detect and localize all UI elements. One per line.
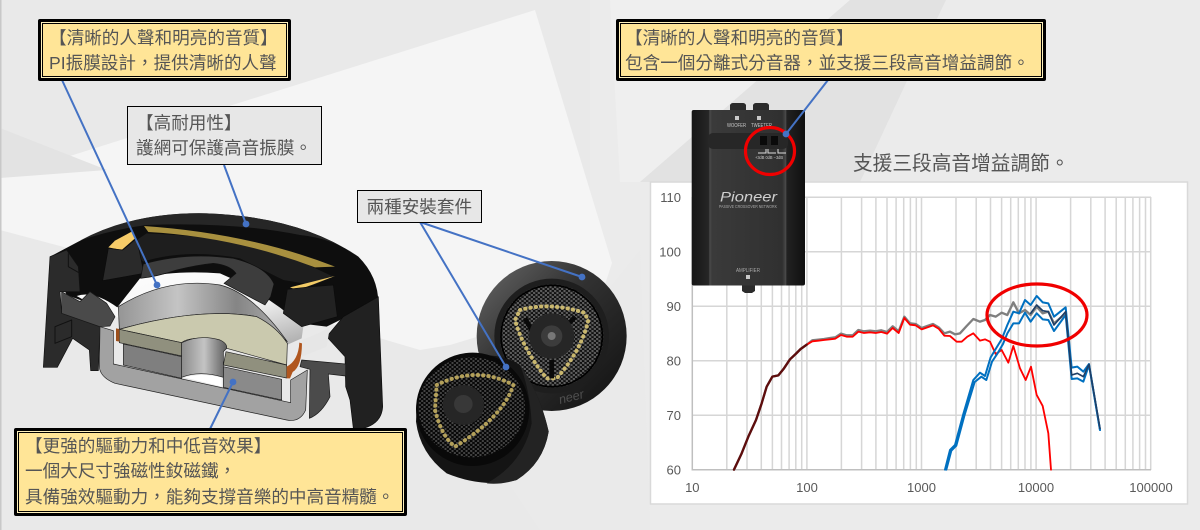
- device labels: Pioneer: [720, 188, 779, 204]
- callout: mounting kits: 兩種安裝套件: [366, 196, 472, 216]
- x axis labels: 100: [796, 480, 818, 495]
- left pillar: [103, 238, 144, 281]
- callout: stronger drive: [14, 428, 407, 516]
- inner back panel: [127, 233, 333, 285]
- flush mount tweeter: [477, 261, 627, 411]
- red highlight: gain switch: [746, 128, 794, 174]
- x axis labels: 10: [685, 480, 700, 495]
- left wall slats: [55, 253, 80, 343]
- callout: stronger drive: 具備強效驅動力，能夠支撐音樂的中高音精髓。: [25, 486, 394, 506]
- illustration: crossover network: [692, 103, 805, 293]
- device labels: TWEETER: [751, 123, 772, 129]
- y axis labels: 110: [660, 190, 681, 205]
- axes: [692, 197, 1151, 470]
- left wall: [43, 250, 100, 371]
- device labels: [719, 123, 783, 274]
- callout: mounting kits: [357, 190, 482, 223]
- y axis labels: [659, 190, 681, 478]
- angled mount tweeter: [403, 340, 549, 484]
- coil left: [116, 328, 119, 342]
- centre bore: [182, 338, 227, 377]
- gold tab right: [290, 276, 335, 290]
- housing back wall: [50, 213, 378, 327]
- white surround: [77, 272, 303, 345]
- right cone detail: [302, 327, 330, 357]
- switch ticks: [758, 149, 786, 153]
- device labels: PASSIVE CROSSOVER NETWORK: [719, 204, 777, 209]
- frequency response curves: [734, 296, 1100, 470]
- plate front right: [223, 352, 287, 378]
- gold strip: [144, 226, 335, 267]
- left flange: [62, 292, 115, 327]
- device labels: WOOFER: [727, 123, 746, 129]
- red highlight: treble gain range: [987, 284, 1087, 346]
- phase plug arch: [141, 256, 274, 305]
- leader: diaphragm: [62, 80, 160, 288]
- crossover body: [692, 110, 805, 286]
- grey full range curve: [734, 302, 1066, 470]
- callout: durability: [127, 106, 322, 165]
- leader: magnet: [210, 379, 236, 429]
- illustration: tweeter pair: [403, 261, 627, 484]
- bore opening: [184, 375, 222, 387]
- callout: durability: 護網可保護高音振膜。: [136, 138, 312, 158]
- leader: flush mount kit: [420, 222, 585, 280]
- chart title: 支援三段高音增益調節。: [853, 153, 1070, 175]
- leader: grille: [224, 165, 249, 227]
- dark red low-frequency curve: [734, 345, 807, 470]
- right wall: [327, 297, 383, 428]
- device labels: +3dB 0dB −3dB: [755, 155, 783, 161]
- y axis labels: 60: [667, 462, 681, 478]
- switch band: [708, 133, 788, 149]
- coil right: [287, 343, 302, 378]
- callout: crossover: 【清晰的人聲和明亮的音質】: [625, 28, 854, 48]
- grille band: [80, 213, 358, 257]
- red woofer curve: [807, 318, 1051, 470]
- right suspension: [300, 360, 346, 418]
- bottom connector: [742, 285, 755, 293]
- leader lines: [62, 80, 828, 429]
- plate front left: [119, 329, 182, 356]
- y axis labels: 80: [667, 354, 681, 368]
- callout: stronger drive: 【更強的驅動力和中低音效果】: [25, 436, 271, 456]
- top connectors: [730, 103, 769, 110]
- blue tweeter curve minus 3dB: [946, 313, 1100, 470]
- magnet left: [123, 344, 182, 378]
- y axis labels: 100: [659, 244, 681, 260]
- x axis labels: 100000: [1129, 480, 1173, 495]
- illustration: speaker cutaway: [43, 213, 383, 428]
- y axis labels: 70: [667, 408, 681, 423]
- blue tweeter curve plus 3dB: [945, 296, 1100, 470]
- leader: crossover switch: [783, 80, 828, 137]
- device labels: AMPLIFIER: [736, 268, 760, 274]
- indicator squares: [735, 116, 761, 279]
- y axis labels: 90: [667, 299, 681, 314]
- callout: durability: 【高耐用性】: [136, 113, 242, 133]
- magnet top plate: [119, 314, 287, 365]
- grid lines: [692, 197, 1151, 470]
- dome band: [118, 283, 287, 342]
- callout: crossover: [616, 19, 1046, 81]
- callout: clear vocals diaphragm: 【清晰的人聲和明亮的音質】: [49, 28, 278, 48]
- switch: [760, 136, 778, 145]
- x axis labels: 10000: [1018, 480, 1054, 495]
- chart panel: [650, 182, 1188, 504]
- navy tweeter curve 0dB: [1031, 305, 1100, 428]
- leader: angled mount kit: [420, 222, 509, 370]
- callout: clear vocals diaphragm: PI振膜設計，提供清晰的人聲: [49, 53, 277, 73]
- U frame: [99, 327, 307, 420]
- callout: crossover: 包含一個分離式分音器，並支援三段高音增益調節。: [625, 52, 1030, 72]
- callout: clear vocals diaphragm: [38, 19, 291, 81]
- gold tabs: [108, 232, 135, 250]
- flush mount tweeter: neer: [557, 387, 586, 407]
- right pillar: [283, 285, 337, 327]
- callout: stronger drive: 一個大尺寸強磁性釹磁鐵，: [25, 461, 236, 481]
- x axis labels: 1000: [907, 480, 936, 495]
- x axis labels: [685, 480, 1173, 495]
- magnet right: [223, 367, 282, 400]
